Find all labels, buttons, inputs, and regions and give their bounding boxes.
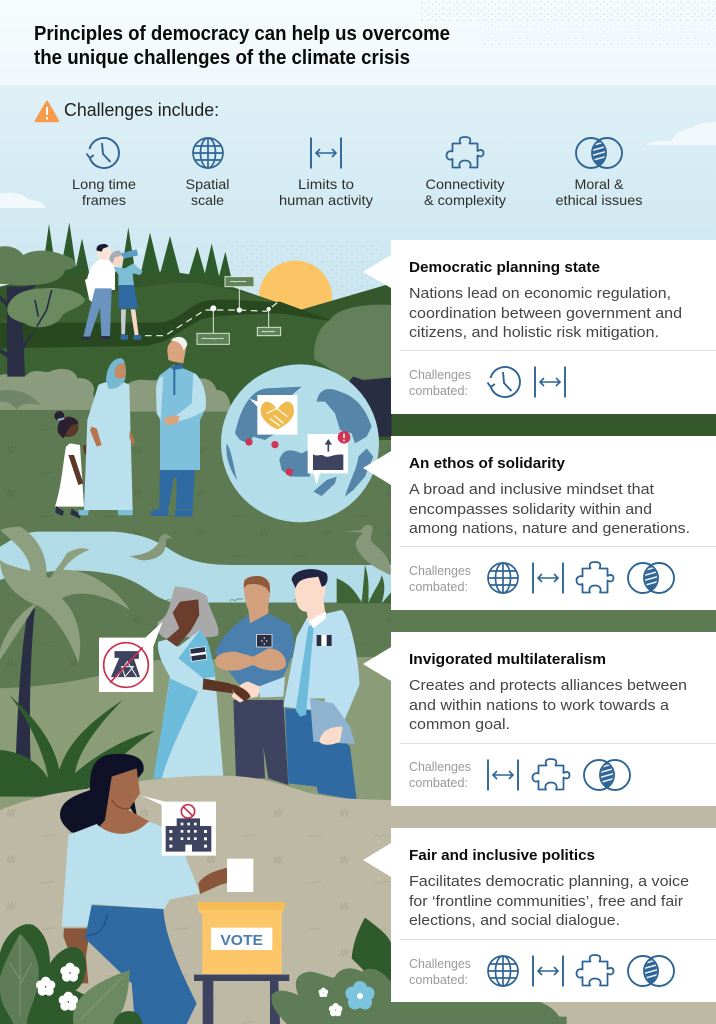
- description: A broad and inclusive mindset that: [409, 481, 655, 498]
- family: woman in hijab: [78, 358, 135, 515]
- panel: fair and inclusive politics: Challenges: [409, 957, 471, 971]
- icon: warning triangle: [36, 102, 58, 121]
- lower bank: [0, 571, 716, 707]
- challenge: long time frames: [72, 138, 136, 208]
- right tree: [314, 305, 392, 437]
- callout: no oil: [99, 622, 163, 692]
- challenge: limits to human activity: human activity: [279, 192, 373, 208]
- challenge: spatial scale: Spatial: [186, 176, 230, 192]
- header band: [0, 0, 716, 85]
- description: Nations lead on economic regulation,: [409, 285, 671, 302]
- grass field: [0, 410, 716, 540]
- sun: [230, 240, 390, 334]
- road: [0, 300, 330, 348]
- panel: invigorated multilateralism: [363, 632, 716, 806]
- panel: an ethos of solidarity: An ethos of solidarity: [409, 455, 566, 472]
- panel: an ethos of solidarity: [363, 436, 716, 610]
- delegates shaking hands: [153, 569, 359, 800]
- panel: invigorated multilateralism: combated:: [409, 776, 468, 790]
- panel: invigorated multilateralism: Invigorated multilateralism: [409, 651, 606, 668]
- bottom foliage right edge: [391, 1002, 562, 1024]
- description: citizens, and holistic risk mitigation.: [409, 324, 659, 341]
- khaki field: [0, 776, 716, 1024]
- forest: [42, 223, 233, 287]
- description: coordination between government and: [409, 305, 682, 322]
- challenge: spatial scale: scale: [191, 192, 224, 208]
- callout: no corporate: [142, 796, 216, 856]
- description: [409, 873, 689, 929]
- title: Principles of democracy can help us overcome: [34, 23, 450, 45]
- description: for ‘frontline communities’, free and fair: [409, 893, 683, 910]
- challenge icons: [488, 562, 674, 594]
- description: among nations, nature and generations.: [409, 520, 690, 537]
- continents: [226, 387, 373, 497]
- panel: fair and inclusive politics: Fair and inclusive politics: [409, 847, 595, 864]
- foliage left: [0, 924, 143, 1024]
- riverbank base: [0, 523, 716, 823]
- river: [0, 532, 392, 603]
- description: Creates and protects alliances between: [409, 677, 687, 694]
- man with crossed arms: [215, 576, 294, 785]
- illustration: democratic planning landscape: [0, 223, 716, 540]
- ballot box: [194, 902, 289, 1024]
- family: girl: [54, 411, 100, 518]
- left tree: [0, 246, 85, 377]
- panel: an ethos of solidarity: Challenges: [409, 564, 471, 578]
- description: [409, 481, 690, 537]
- panel: democratic planning state: [363, 240, 716, 414]
- bushes: [0, 369, 232, 412]
- handshake: [228, 682, 260, 703]
- challenge: connectivity and complexity: & complexity: [424, 192, 506, 208]
- callout: solidarity: [249, 395, 297, 435]
- voting woman: [60, 754, 233, 1024]
- woman with grey hair: [153, 587, 233, 778]
- challenge: spatial scale: [186, 138, 230, 208]
- header text: [34, 23, 450, 121]
- family: man in kurta: [150, 337, 206, 517]
- spiky plant: [0, 695, 155, 797]
- planning route: [145, 277, 281, 344]
- title: the unique challenges of the climate crisis: [34, 47, 410, 69]
- panel: an ethos of solidarity: combated:: [409, 580, 468, 594]
- background sky: [0, 85, 716, 385]
- clouds: [0, 122, 716, 208]
- panel: democratic planning state: Challenges: [409, 368, 471, 382]
- palm tree: [0, 527, 130, 787]
- description: elections, and social dialogue.: [409, 912, 620, 929]
- callout: sea level rise: [308, 431, 350, 485]
- pins: [245, 438, 293, 476]
- challenge: moral and ethical issues: Moral &: [574, 176, 624, 192]
- description: [409, 677, 687, 733]
- panel: democratic planning state: combated:: [409, 384, 468, 398]
- challenge icons: [488, 366, 565, 398]
- challenge: connectivity and complexity: Connectivity: [426, 176, 504, 192]
- description: [409, 285, 682, 341]
- subheading: Challenges include:: [64, 99, 219, 120]
- description: common goal.: [409, 716, 510, 733]
- woman with binoculars: [109, 247, 144, 340]
- reeds: [337, 565, 392, 603]
- panel: democratic planning state: Democratic planning state: [409, 259, 600, 276]
- challenge: moral and ethical issues: [556, 138, 642, 208]
- illustration: multilateralism landscape: [0, 523, 716, 823]
- challenge: limits to human activity: Limits to: [298, 176, 354, 192]
- description: encompasses solidarity within and: [409, 501, 652, 518]
- illustration: fair politics landscape: [0, 754, 716, 1024]
- challenge: limits to human activity: [279, 138, 373, 208]
- man with tie and folder: [258, 569, 359, 800]
- olive field: [0, 657, 716, 820]
- challenge: long time frames: frames: [82, 192, 126, 208]
- description: Facilitates democratic planning, a voice: [409, 873, 689, 890]
- ballot paper: [227, 859, 253, 892]
- hills: [0, 271, 716, 440]
- birds and reeds: [129, 525, 391, 575]
- challenge: connectivity and complexity: [424, 137, 506, 208]
- man in white shirt: [82, 244, 115, 339]
- challenge icons: [488, 955, 674, 986]
- challenge icons: [488, 759, 630, 790]
- globe: [221, 364, 379, 522]
- challenge: long time frames: Long time: [72, 176, 136, 192]
- panel: fair and inclusive politics: combated:: [409, 973, 468, 987]
- title: [34, 23, 450, 69]
- panel: invigorated multilateralism: Challenges: [409, 760, 471, 774]
- ballot box: VOTE: [220, 932, 263, 949]
- panel: fair and inclusive politics: [363, 828, 716, 1002]
- foliage right: [271, 918, 567, 1024]
- description: and within nations to work towards a: [409, 697, 670, 714]
- challenge: moral and ethical issues: ethical issues: [556, 192, 642, 208]
